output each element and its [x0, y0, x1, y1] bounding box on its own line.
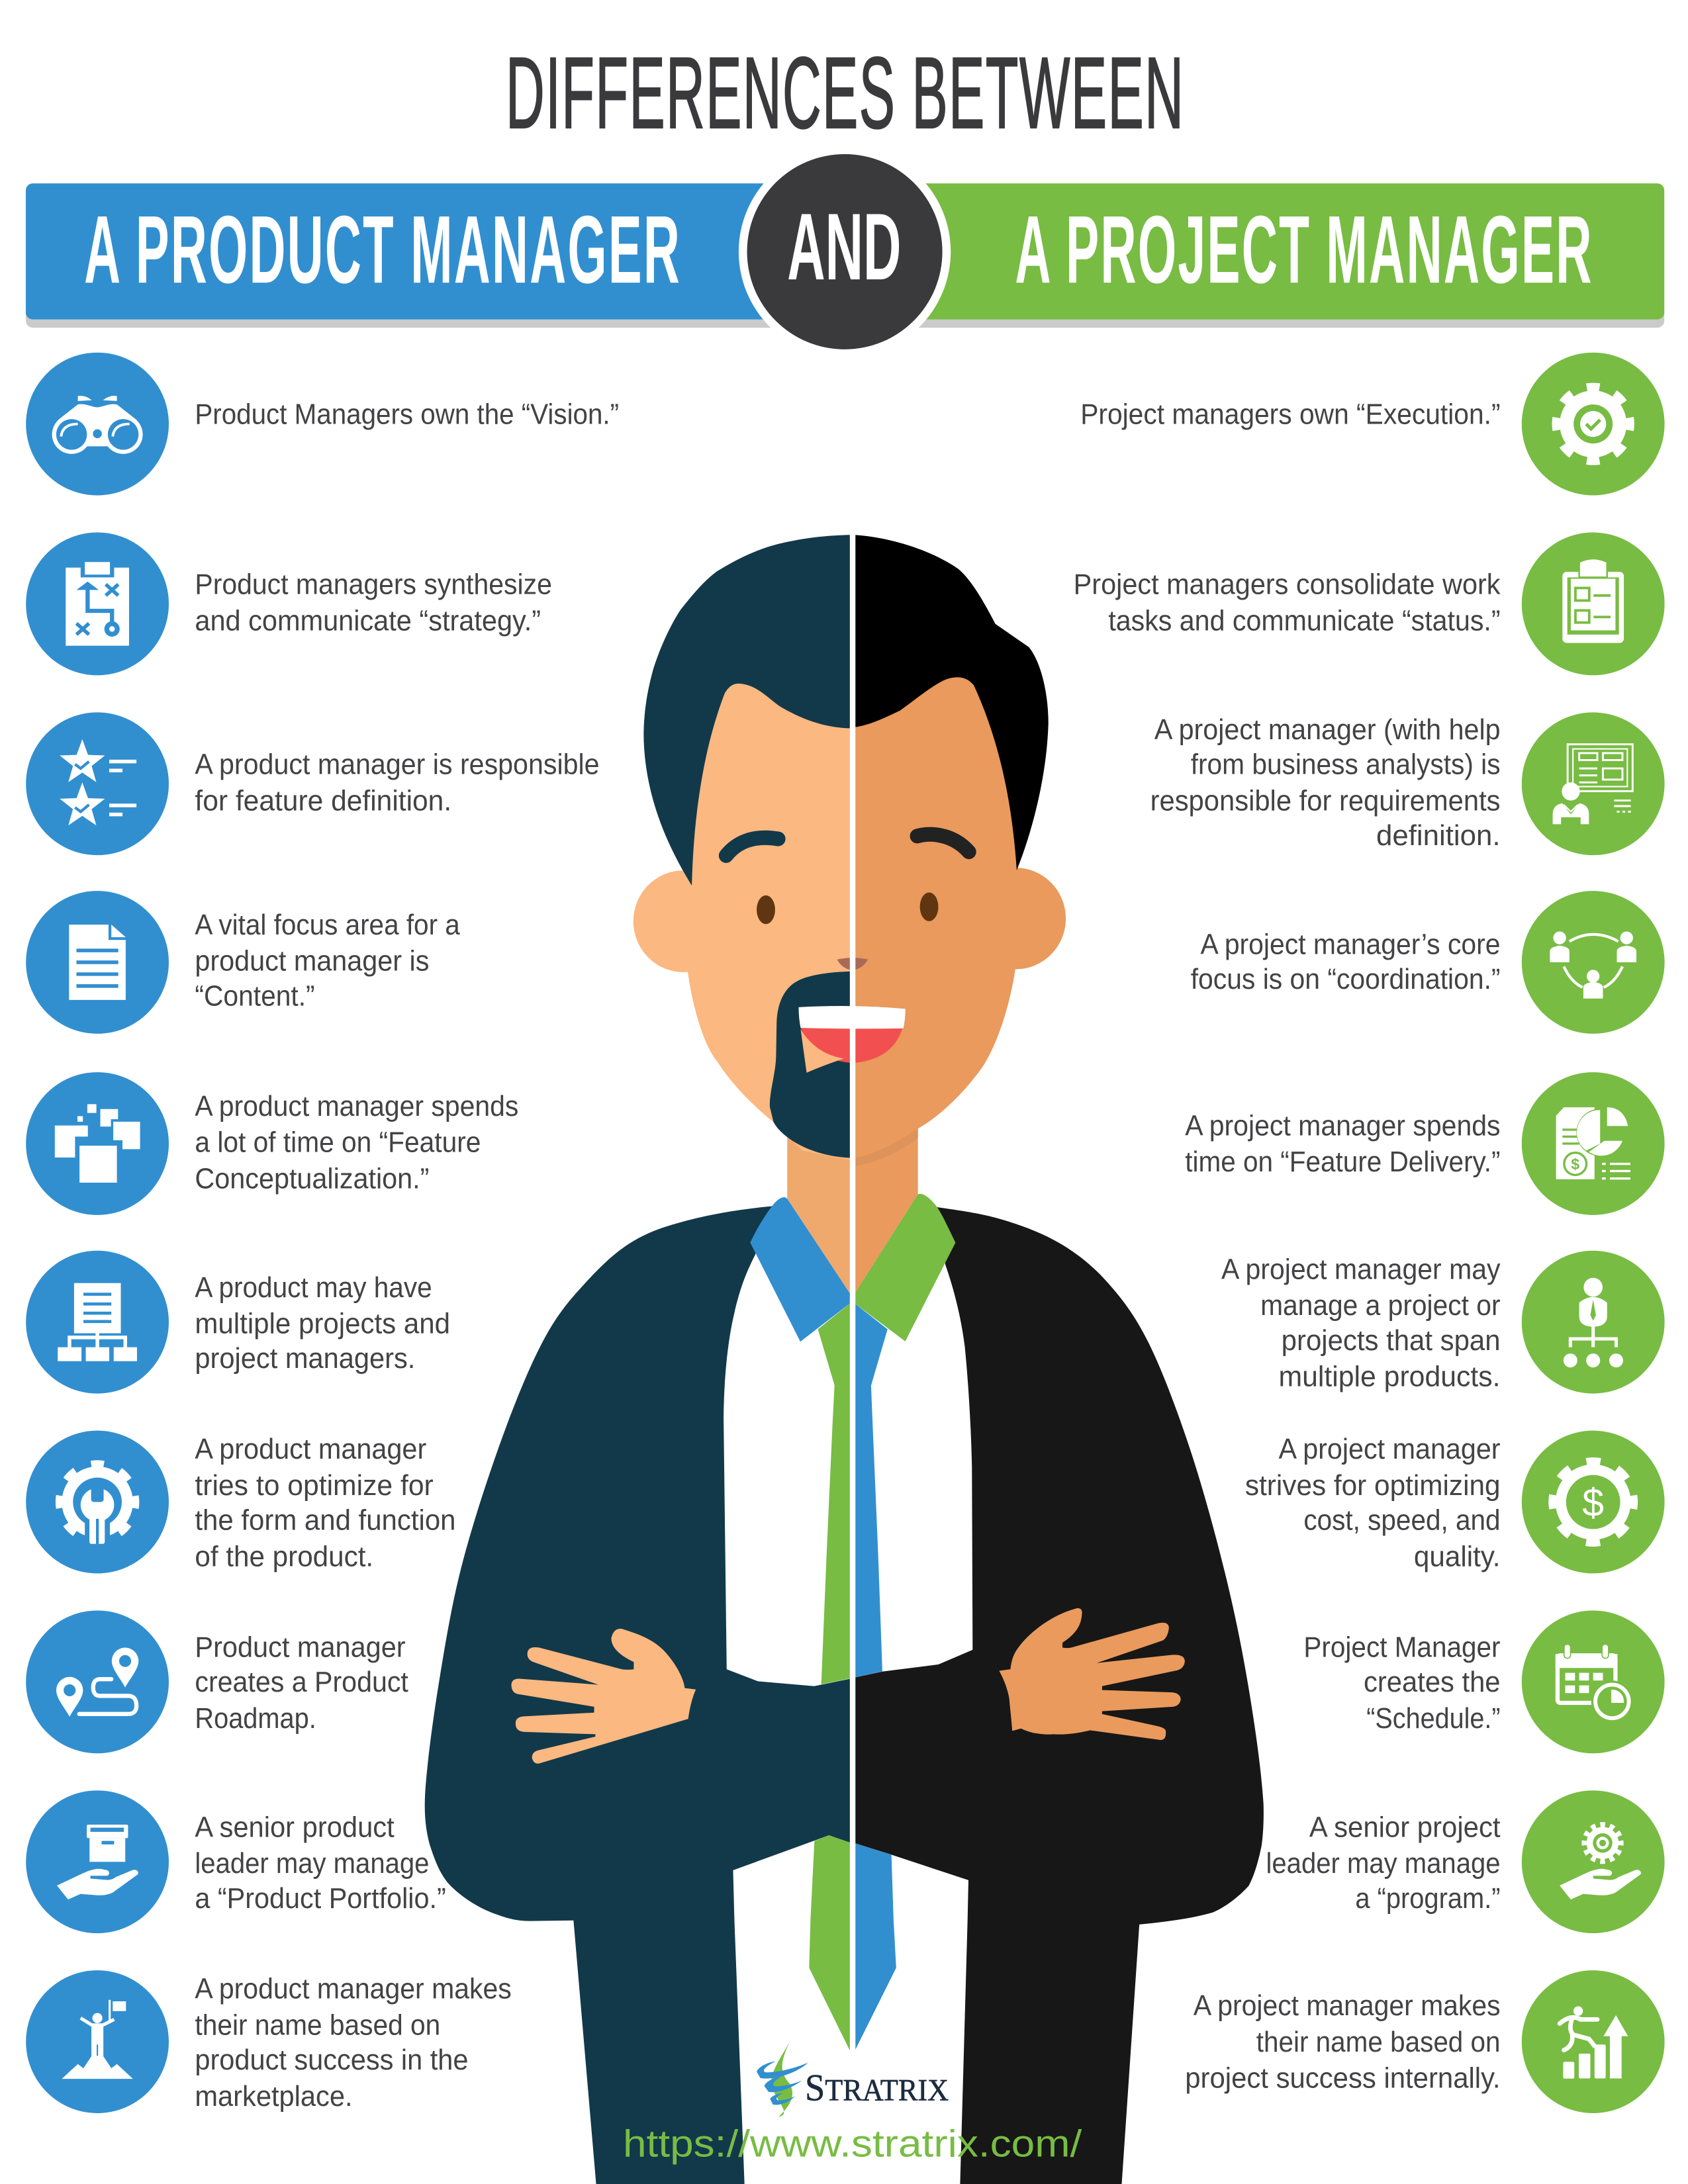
panel: product manager column [26, 353, 619, 2113]
text: “Schedule.” [1366, 1703, 1501, 1735]
goatee [770, 972, 851, 1158]
text [1185, 1990, 1501, 2095]
text: their name based on [1256, 2026, 1501, 2058]
chin shadow [854, 1128, 918, 1167]
logo: Stratrix [757, 2041, 949, 2116]
text: Product managers synthesize [195, 569, 552, 601]
text: time on “Feature Delivery.” [1185, 1146, 1501, 1178]
text: A senior project [1309, 1811, 1501, 1843]
text: tasks and communicate “status.” [1108, 605, 1501, 637]
left hair [643, 535, 851, 886]
text [1245, 1433, 1501, 1572]
item 4: coordination [1191, 891, 1665, 1034]
text: responsible for requirements [1150, 785, 1501, 817]
icon: gear with wrench [26, 1431, 169, 1573]
left jacket [425, 1206, 851, 2184]
text: a lot of time on “Feature [195, 1127, 481, 1159]
text [1191, 929, 1501, 995]
right jacket [854, 1207, 1264, 2184]
item 2: status [1074, 533, 1665, 675]
tie upper [818, 1302, 888, 1684]
text [1221, 1253, 1501, 1393]
item 8: product roadmap [26, 1610, 408, 1753]
icon: coordinating people [1522, 891, 1665, 1034]
icon: status clipboard [1522, 533, 1665, 675]
item 7: form and function [26, 1431, 455, 1573]
icon: report and pie chart [1522, 1072, 1665, 1215]
text: creates a Product [195, 1666, 408, 1698]
text [195, 749, 600, 817]
item 9: program [1266, 1790, 1665, 1933]
nose [837, 958, 868, 970]
right hair [853, 535, 1049, 870]
text [195, 1433, 455, 1572]
neck [787, 1102, 918, 1295]
text: Project Manager [1303, 1631, 1501, 1663]
text: product manager is [195, 946, 429, 978]
icon: org chart document [26, 1251, 169, 1394]
item 7: cost speed quality [1245, 1431, 1665, 1573]
AND badge: AND [787, 194, 901, 300]
text: A project manager spends [1185, 1110, 1501, 1142]
banner: project manager [837, 183, 1664, 320]
right face [854, 669, 1017, 1158]
right eyebrow [917, 835, 969, 852]
text: A product manager makes [195, 1974, 512, 2005]
center divider [850, 530, 855, 2057]
icon: gear on hand [1522, 1790, 1665, 1933]
text [195, 1974, 512, 2113]
icon: analyst with board [1522, 712, 1665, 855]
item 3: requirements definition [1150, 712, 1665, 855]
text: leader may manage [195, 1848, 429, 1880]
text [1074, 569, 1501, 637]
text: tries to optimize for [195, 1470, 434, 1502]
item 1: execution [1080, 353, 1665, 496]
collar green [854, 1194, 955, 1342]
item 5: feature conceptualization [26, 1072, 518, 1215]
text: the form and function [195, 1505, 455, 1537]
item 9: product portfolio [26, 1790, 446, 1933]
text: of the product. [195, 1541, 373, 1572]
text: Product Managers own the “Vision.” [195, 399, 619, 431]
right eye [920, 892, 938, 921]
text: a “program.” [1355, 1883, 1501, 1915]
text: A product manager is responsible [195, 749, 600, 781]
text: A vital focus area for a [195, 909, 461, 941]
item 1: vision [26, 353, 619, 496]
text: definition. [1376, 820, 1501, 852]
text: a “Product Portfolio.” [195, 1883, 446, 1915]
logo: Stratrix: STRATRIX [805, 2068, 949, 2109]
text [1303, 1631, 1501, 1735]
item 10: project success [1185, 1970, 1665, 2113]
icon: scattered blocks [26, 1072, 169, 1215]
text: A project manager may [1221, 1253, 1501, 1285]
item 6: multiple projects [26, 1251, 450, 1394]
banner: product manager: A PRODUCT MANAGER [84, 195, 681, 303]
icon: calendar with clock [1522, 1610, 1665, 1753]
text: project managers. [195, 1343, 415, 1375]
text: focus is on “coordination.” [1191, 964, 1501, 995]
item 4: content [26, 891, 461, 1034]
icon: manager hierarchy [1522, 1251, 1665, 1394]
left hand [511, 1629, 696, 1764]
text: multiple projects and [195, 1308, 450, 1340]
left face [688, 669, 851, 1160]
tie lower [809, 1835, 896, 2053]
panel: project manager column [1074, 353, 1665, 2113]
text: A product manager spends [195, 1091, 518, 1122]
text: A project manager [1278, 1433, 1501, 1465]
text: A project manager’s core [1200, 929, 1501, 960]
text: “Content.” [195, 980, 315, 1012]
text: strives for optimizing [1245, 1470, 1501, 1502]
header banner [26, 146, 1664, 358]
text [195, 909, 461, 1012]
central figure: half product manager, half project manager [425, 530, 1264, 2184]
text: cost, speed, and [1303, 1505, 1501, 1537]
text [195, 1811, 446, 1915]
text: Project managers own “Execution.” [1080, 399, 1501, 431]
text [195, 569, 552, 637]
icon: strategy clipboard [26, 533, 169, 675]
text: A project manager makes [1194, 1990, 1501, 2022]
text: A senior product [195, 1811, 395, 1843]
text: A project manager (with help [1154, 714, 1501, 746]
item 6: multiple products [1221, 1251, 1665, 1394]
icon: dollar gear: $ [1582, 1481, 1604, 1525]
collar blue [750, 1197, 851, 1342]
icon: document [26, 891, 169, 1034]
item 8: schedule [1303, 1610, 1665, 1753]
text [195, 1631, 408, 1735]
text [1150, 714, 1501, 852]
text [195, 1272, 450, 1375]
icon: box on hand [26, 1790, 169, 1933]
text [1266, 1811, 1501, 1915]
text: Conceptualization.” [195, 1163, 429, 1195]
text: project success internally. [1185, 2063, 1501, 2095]
icon: dollar gear [1522, 1431, 1665, 1573]
item 2: strategy [26, 533, 552, 675]
text: manage a project or [1260, 1290, 1501, 1322]
icon: starred checklist [26, 712, 169, 855]
text: Roadmap. [195, 1703, 316, 1735]
AND badge [739, 146, 951, 358]
text: product success in the [195, 2044, 468, 2076]
text: and communicate “strategy.” [195, 605, 541, 637]
text: projects that span [1282, 1325, 1501, 1357]
text: Product manager [195, 1631, 406, 1663]
text [1185, 1110, 1501, 1178]
text: quality. [1414, 1541, 1501, 1572]
text: their name based on [195, 2010, 440, 2042]
icon: gear with check [1522, 353, 1665, 496]
item 3: feature definition [26, 712, 600, 855]
left eye [757, 895, 775, 924]
text: A product may have [195, 1272, 432, 1304]
icon: report and pie chart: $ [1571, 1156, 1579, 1173]
icon: climber and growth bars [1522, 1970, 1665, 2113]
left eyebrow [726, 838, 778, 856]
icon: person on mountain [26, 1970, 169, 2113]
right ear [965, 868, 1066, 970]
website url: https://www.stratrix.com/ [623, 2122, 1082, 2165]
icon: roadmap pins [26, 1610, 169, 1753]
text: creates the [1364, 1666, 1501, 1698]
text: from business analysts) is [1191, 749, 1501, 781]
banner: product manager [26, 183, 851, 320]
right hand [999, 1608, 1185, 1740]
icon: binoculars [26, 353, 169, 496]
text: leader may manage [1266, 1848, 1501, 1880]
text [195, 1091, 518, 1195]
mouth [799, 1006, 906, 1073]
item 10: product success [26, 1970, 512, 2113]
text: for feature definition. [195, 785, 451, 817]
text: A product manager [195, 1433, 426, 1465]
item 5: feature delivery [1185, 1072, 1665, 1215]
text: marketplace. [195, 2081, 353, 2113]
left ear [633, 870, 734, 972]
text: Project managers consolidate work [1074, 569, 1501, 601]
text: multiple products. [1278, 1361, 1501, 1393]
